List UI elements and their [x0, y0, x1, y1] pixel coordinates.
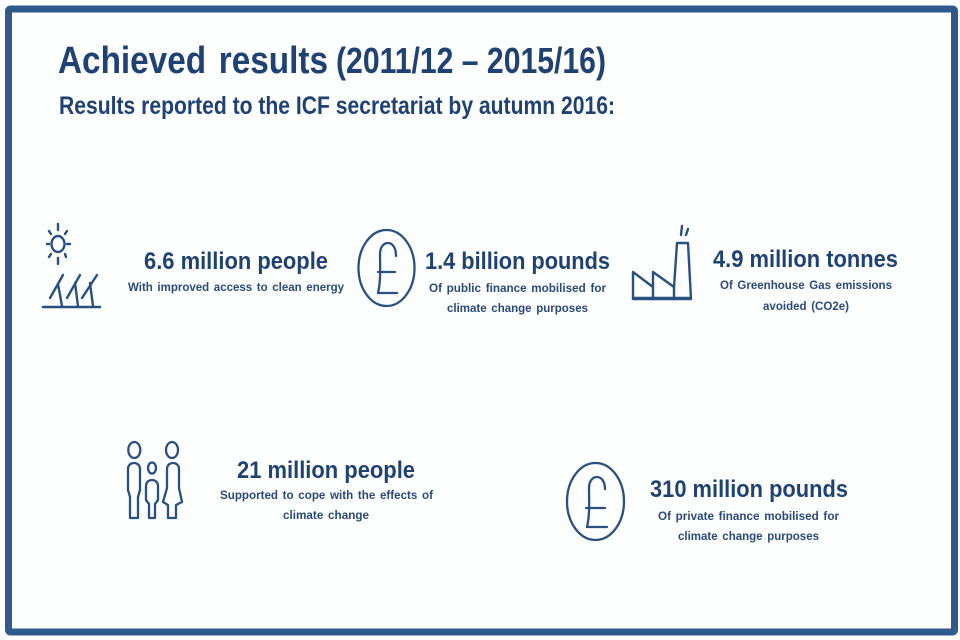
title: Achieved results — [58, 40, 328, 82]
stat: 310 million pounds: Of private finance mobilised for — [658, 509, 839, 523]
stat: 1.4 billion pounds: Of public finance mobilised for — [429, 281, 606, 295]
stat: 6.6 million people: 6.6 million people — [144, 248, 328, 275]
subtitle: Results reported to the ICF secretariat by autumn 2016: — [59, 92, 615, 120]
stat: 4.9 million tonnes: 4.9 million tonnes — [713, 246, 898, 273]
title: (2011/12 – 2015/16) — [336, 40, 606, 81]
stat: 21 million people — [220, 457, 434, 522]
icon: family — [128, 442, 182, 518]
stat: 4.9 million tonnes: Of Greenhouse Gas emissions — [720, 278, 892, 292]
stat: 1.4 billion pounds: climate change purposes — [447, 301, 588, 315]
title — [58, 40, 606, 82]
stat: 6.6 million people: With improved access to clean energy — [128, 280, 344, 294]
stat: 4.9 million tonnes — [713, 246, 898, 313]
stat: 1.4 billion pounds — [425, 248, 610, 315]
stat: 6.6 million people — [128, 248, 344, 294]
stat: 21 million people: 21 million people — [237, 457, 415, 484]
icon: pound coin — [567, 463, 624, 540]
icon: sun and solar panels — [43, 224, 100, 307]
stat: 310 million pounds: 310 million pounds — [650, 476, 848, 503]
stat: 310 million pounds: climate change purposes — [678, 529, 819, 543]
stat: 21 million people: climate change — [283, 508, 369, 522]
stat: 1.4 billion pounds: 1.4 billion pounds — [425, 248, 610, 275]
stat: 21 million people: Supported to cope with the effects of — [220, 488, 434, 502]
icon: factory — [633, 226, 691, 299]
stat: 4.9 million tonnes: avoided (CO2e) — [763, 299, 849, 313]
icon: pound coin — [358, 230, 414, 306]
stat: 310 million pounds — [650, 476, 848, 543]
